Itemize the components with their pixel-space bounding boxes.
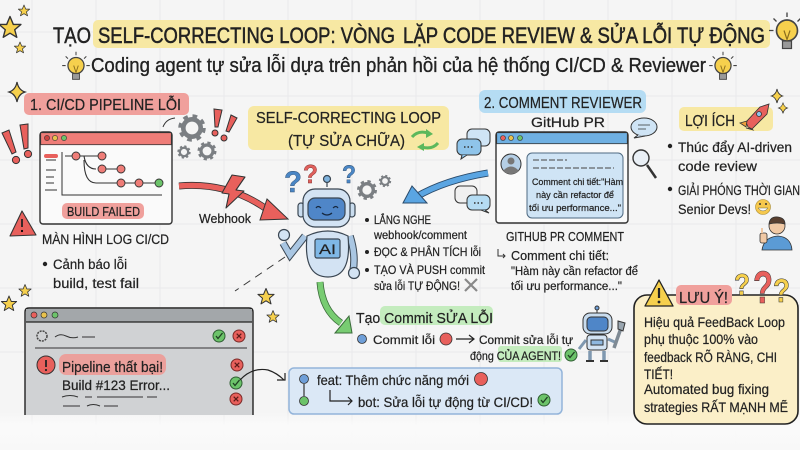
commit text: Commit lỗi (373, 332, 435, 347)
text block: PR comment: "Hàm này cần refactor để (511, 266, 638, 278)
panel: warning: Automated bug fixing (644, 381, 769, 397)
head (298, 176, 355, 227)
heading: CI/CD pipeline: 1. CI/CD PIPELINE LỖI (30, 96, 181, 114)
panel: PR window (496, 132, 628, 223)
decorative stars: mid (1, 284, 279, 322)
title (53, 20, 770, 48)
panel: warning: feedback RÕ RÀNG, CHI (644, 349, 777, 365)
title: SELF-CORRECTING LOOP: VÒNG (98, 23, 395, 48)
panel: PR window: tối ưu performance..." (529, 203, 621, 214)
text block: log screen: build, test fail (53, 276, 139, 291)
robot actions list: TẠO VÀ PUSH commit (374, 262, 486, 277)
robot actions list: sửa lỗi TỰ ĐỘNG! (374, 278, 460, 293)
robot actions list: LẮNG NGHE (374, 212, 431, 227)
arrow: webhook (179, 175, 288, 226)
heading: reviewer: GitHub PR (531, 114, 605, 130)
arrow: robot to commit (320, 282, 352, 333)
small gears (359, 176, 390, 198)
commit text (356, 306, 577, 363)
arrow: reviewer to robot (403, 173, 488, 203)
benefits list (668, 139, 800, 217)
robot actions list (365, 212, 486, 293)
decorative stars: top left (0, 5, 30, 102)
panel: warning: ? (753, 262, 773, 313)
panel: commit graph: bot: Sửa lỗi tự động từ CI/CD! (358, 394, 533, 410)
body (278, 230, 360, 278)
text block: log screen: Cảnh báo lỗi (53, 257, 127, 272)
benefits list: code review (678, 158, 758, 174)
icon: light bulbs (62, 12, 800, 79)
heading: self-correcting loop: (TỰ SỬA CHỮA) (288, 130, 405, 150)
panel: commit graph: feat: Thêm chức năng mới (317, 372, 469, 388)
robot actions list: webhook/comment (373, 228, 468, 242)
heading: benefits: LỢI ÍCH (685, 111, 735, 130)
heading: self-correcting loop (248, 106, 449, 151)
panel: warning: ? (734, 267, 750, 302)
icon: warning triangle (10, 211, 36, 236)
commit text: Commit sửa lỗi tự (479, 332, 573, 347)
robot: AI (319, 241, 336, 257)
text block: log screen: MÀN HÌNH LOG CI/CD (42, 232, 169, 247)
icon: rocket (740, 89, 787, 130)
panel: warning: phụ thuộc 100% vào (644, 331, 758, 347)
icon: exclamation marks left (2, 124, 32, 164)
arrow: pipeline to commit (240, 369, 285, 380)
benefits list: Senior Devs! (678, 201, 751, 217)
heading: reviewer: 2. COMMENT REVIEWER (484, 95, 642, 112)
commit text: động CỦA AGENT! (470, 348, 561, 363)
subtitle: Coding agent tự sửa lỗi dựa trên phản hồi của hệ thống CI/CD & Reviewer (91, 54, 706, 77)
question marks (284, 159, 356, 199)
panel: warning: LƯU Ý! (679, 290, 728, 307)
text block: PR comment (498, 229, 638, 293)
benefits list: Thúc đẩy AI-driven (678, 139, 792, 155)
title: TẠO (53, 23, 91, 48)
question marks: ? (303, 159, 318, 189)
icon: chat bubbles (455, 118, 657, 213)
heading: benefits (679, 107, 773, 131)
panel: warning: Hiệu quả FeedBack Loop (644, 314, 785, 330)
text block: PR comment: GITHUB PR COMMENT (506, 229, 624, 244)
arrow: webhook: Webhook (199, 212, 252, 226)
question marks: ? (342, 161, 356, 189)
icon: gears and exclamations (163, 109, 237, 159)
text block: log screen (42, 232, 169, 291)
heading: reviewer (479, 90, 646, 130)
commit text: Tạo Commit SỬA LỖI (356, 309, 493, 327)
robot actions list: ĐỌC & PHÂN TÍCH lỗi (374, 244, 481, 259)
heading: self-correcting loop: SELF-CORRECTING LOOP (256, 110, 441, 127)
panel: PR window: Comment chi tiết:"Hàm (532, 177, 623, 188)
panel: failed pipeline window: Pipeline thất bại! (62, 360, 163, 376)
panel: failed pipeline window: Build #123 Error... (62, 377, 170, 393)
panel: commit graph (289, 368, 562, 414)
label: build failed: BUILD FAILED (67, 205, 140, 219)
panel: CI/CD window (40, 132, 172, 224)
question marks: ? (284, 166, 302, 199)
robot (278, 159, 390, 278)
text block: PR comment: tối ưu performance..." (511, 281, 622, 293)
icon: person thumbs up (760, 217, 792, 250)
dashed connector (235, 257, 285, 291)
panel: warning (634, 262, 798, 424)
icon: small robot with wrench (579, 306, 625, 361)
panel: warning: TIẾT! (644, 366, 673, 382)
panel: failed pipeline window (25, 308, 253, 415)
panel: PR window: này cần refactor để (536, 190, 614, 201)
panel: warning: ? (773, 272, 790, 309)
text block: PR comment: Comment chi tiết: (511, 248, 609, 263)
